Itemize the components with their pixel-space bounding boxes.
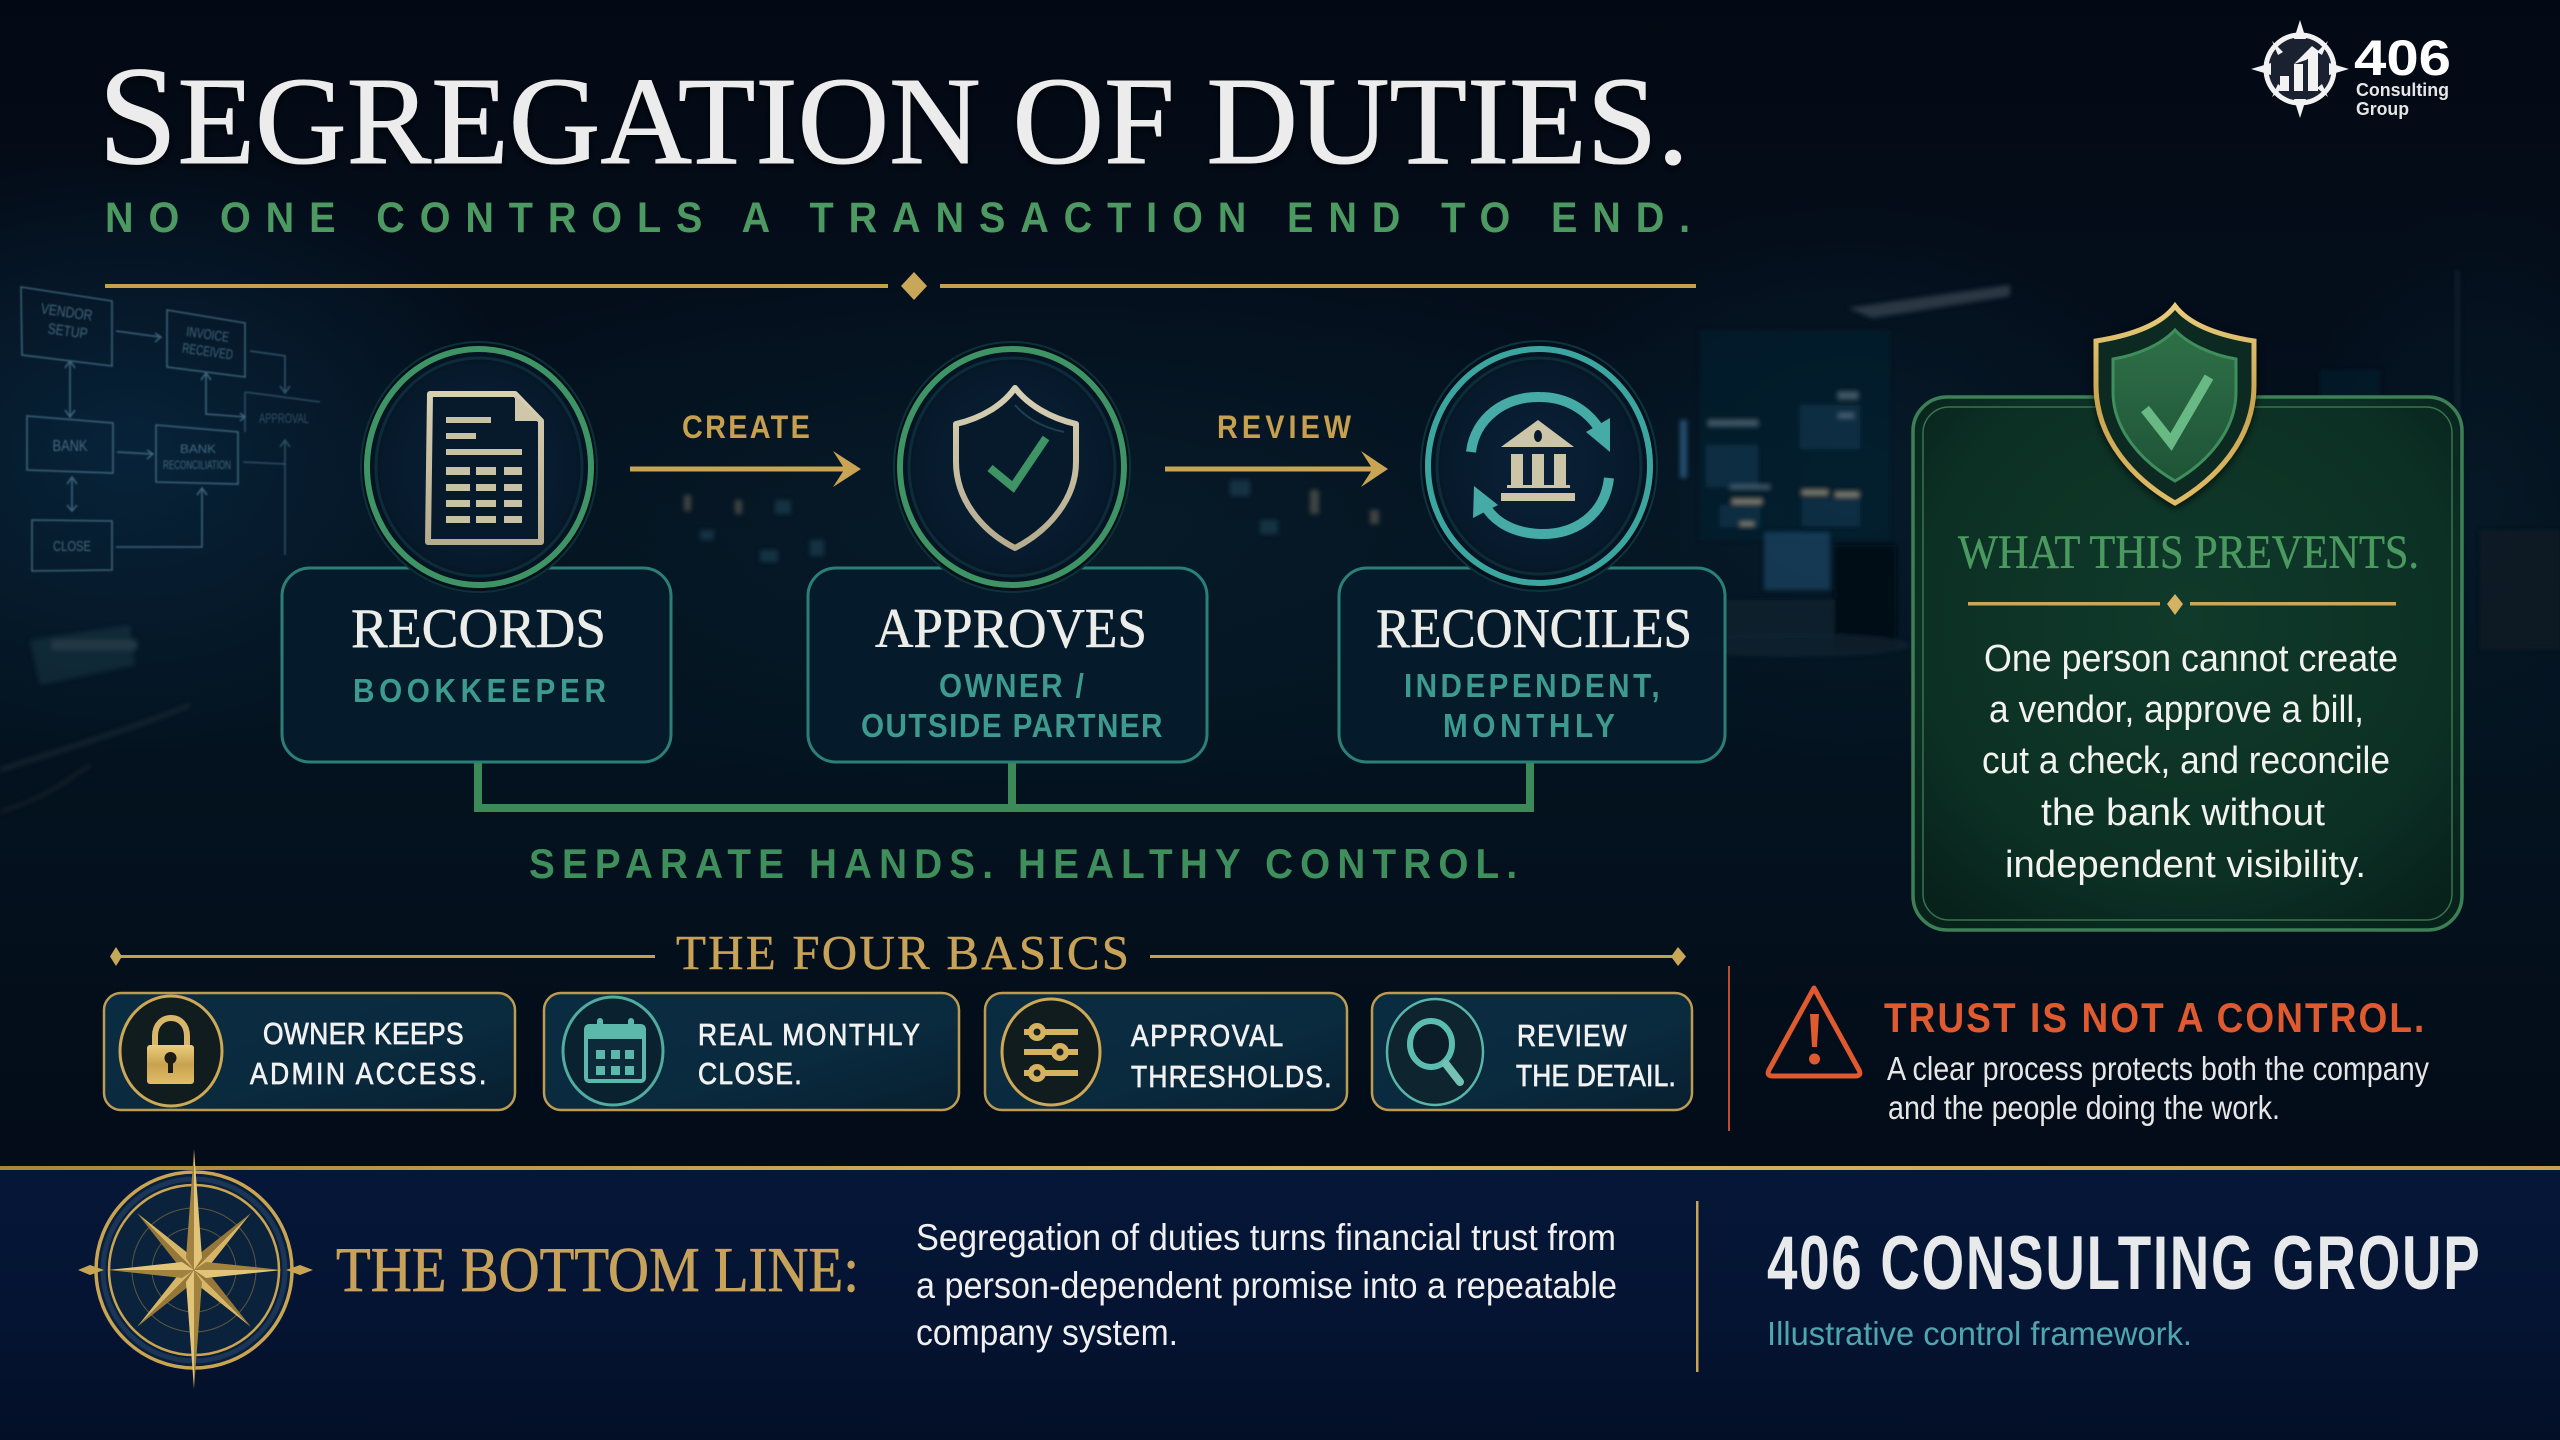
callout text <box>1887 1050 2429 1126</box>
title divider with diamond <box>105 272 1696 300</box>
logo mark: compass with bars <box>2251 20 2349 118</box>
heading: the four basics <box>110 925 1686 980</box>
tagline: SEPARATE HANDS. HEALTHY CONTROL. <box>529 839 1517 887</box>
role holder: independent, monthly: MONTHLY <box>1443 708 1615 744</box>
logo wordmark <box>2354 30 2451 119</box>
subtitle: NO ONE CONTROLS A TRANSACTION END TO END. <box>105 193 1690 241</box>
label: REVIEW <box>1517 1019 1627 1054</box>
logo: 406 consulting group <box>2251 20 2451 119</box>
callout: trust is not a control <box>1728 966 2429 1131</box>
role holder: owner or outside partner: OWNER / <box>939 668 1084 704</box>
panel heading: WHAT THIS PREVENTS. <box>1958 526 2419 579</box>
process flow sketch behind the content: SETUP <box>47 320 89 343</box>
label: APPROVAL <box>1131 1019 1283 1054</box>
process flow sketch behind the content: BANK <box>52 438 88 455</box>
role name: records: RECORDS <box>351 598 606 660</box>
process flow sketch behind the content: CLOSE <box>53 538 91 555</box>
label: OWNER KEEPS <box>263 1017 464 1052</box>
process flow sketch behind the content: RECEIVED <box>181 340 234 363</box>
title: SEGREGATION OF DUTIES. <box>98 38 1689 194</box>
role card: reconciles <box>1339 568 1725 762</box>
label <box>1131 1019 1332 1095</box>
panel text: the bank without <box>2041 792 2325 834</box>
basic 3: approval thresholds <box>985 993 1347 1110</box>
icon: calendar <box>563 997 663 1105</box>
label: CLOSE. <box>698 1057 802 1092</box>
role name: reconciles: RECONCILES <box>1376 598 1692 660</box>
callout text: A clear process protects both the company <box>1887 1050 2429 1087</box>
arrow: create <box>630 410 861 487</box>
logo wordmark: Consulting <box>2356 80 2449 100</box>
basic 2: real monthly close <box>544 993 959 1110</box>
footer heading: THE BOTTOM LINE: <box>336 1234 859 1305</box>
connector bracket joining the three roles <box>478 762 1530 808</box>
footer text <box>916 1217 1617 1353</box>
role card: approves <box>808 568 1207 762</box>
footer band <box>0 1149 2560 1440</box>
label: ADMIN ACCESS. <box>250 1057 486 1092</box>
label <box>250 1017 486 1092</box>
process flow sketch behind the content <box>21 287 320 571</box>
footnote: Illustrative control framework. <box>1767 1315 2192 1352</box>
arrow: review <box>1165 410 1388 487</box>
arrow: create: CREATE <box>682 410 810 445</box>
role card: records <box>282 568 671 762</box>
panel divider <box>1968 594 2396 615</box>
icon: warning triangle <box>1768 988 1860 1076</box>
process flow sketch behind the content: RECONCILIATION <box>163 458 231 472</box>
role holder: independent, monthly: INDEPENDENT, <box>1404 668 1660 704</box>
process flow sketch behind the content: BANK <box>180 442 216 456</box>
arrow: review: REVIEW <box>1217 410 1351 445</box>
panel text: One person cannot create <box>1984 638 2398 680</box>
panel text <box>1982 638 2398 886</box>
role holder: bookkeeper: BOOKKEEPER <box>353 673 606 709</box>
panel: what this prevents <box>1913 306 2462 930</box>
icon: shield with check in green ring <box>894 342 1130 592</box>
role holder: owner or outside partner: OUTSIDE PARTNER <box>861 708 1163 744</box>
process flow sketch behind the content: INVOICE <box>185 323 230 345</box>
label: THE DETAIL. <box>1516 1059 1676 1094</box>
role holder: owner or outside partner <box>861 668 1163 744</box>
callout text: and the people doing the work. <box>1888 1089 2280 1126</box>
icon: document in green ring <box>361 342 597 592</box>
callout heading: TRUST IS NOT A CONTROL. <box>1884 995 2424 1042</box>
icon: magnifier <box>1387 999 1483 1105</box>
logo wordmark: Group <box>2356 99 2409 119</box>
label: REAL MONTHLY <box>698 1018 920 1053</box>
footer text: a person-dependent promise into a repeatable <box>916 1265 1617 1306</box>
icon: gold shield with check <box>2096 306 2254 503</box>
footer text: Segregation of duties turns financial trust from <box>916 1217 1616 1258</box>
basic 1: owner keeps admin access <box>104 993 515 1110</box>
icon: sliders <box>1002 999 1100 1105</box>
icon: padlock <box>120 996 222 1106</box>
label: THRESHOLDS. <box>1131 1060 1332 1095</box>
company name: 406 CONSULTING GROUP <box>1767 1221 2480 1306</box>
heading: the four basics: THE FOUR BASICS <box>676 925 1129 980</box>
process flow sketch behind the content: VENDOR <box>40 301 94 325</box>
panel text: cut a check, and reconcile <box>1982 740 2390 782</box>
process flow sketch behind the content: APPROVAL <box>259 410 309 426</box>
footer text: company system. <box>916 1312 1178 1353</box>
role holder: independent, monthly <box>1404 668 1660 744</box>
basic 4: review the detail <box>1372 993 1692 1110</box>
icon: gold compass rose <box>78 1149 313 1389</box>
icon: bank with circular arrows in teal ring <box>1421 341 1657 591</box>
label <box>698 1018 920 1092</box>
logo wordmark: 406 <box>2354 30 2451 86</box>
panel text: a vendor, approve a bill, <box>1989 689 2364 731</box>
role name: approves: APPROVES <box>875 598 1147 660</box>
panel text: independent visibility. <box>2005 844 2366 886</box>
label <box>1516 1019 1676 1094</box>
